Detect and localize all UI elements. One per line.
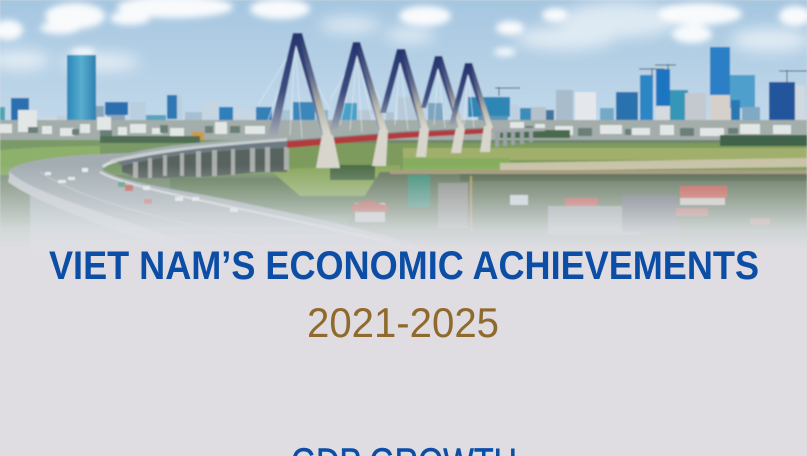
subtitle: period: 2021-2025 xyxy=(307,299,499,346)
highway xyxy=(8,137,430,250)
bridge cables xyxy=(258,45,486,138)
photo: Nhat Tan bridge and Hanoi skyline xyxy=(0,0,807,250)
riverside houses xyxy=(352,175,770,235)
low-rise city band xyxy=(0,110,807,142)
riverside fields xyxy=(0,130,807,250)
bridge pylons xyxy=(268,33,493,168)
skyline buildings xyxy=(0,47,805,132)
construction cranes xyxy=(495,64,807,96)
bridge red deck xyxy=(287,128,492,148)
clouds xyxy=(0,0,807,71)
bottom fade into background xyxy=(0,165,807,250)
viaduct with piers xyxy=(110,128,545,178)
